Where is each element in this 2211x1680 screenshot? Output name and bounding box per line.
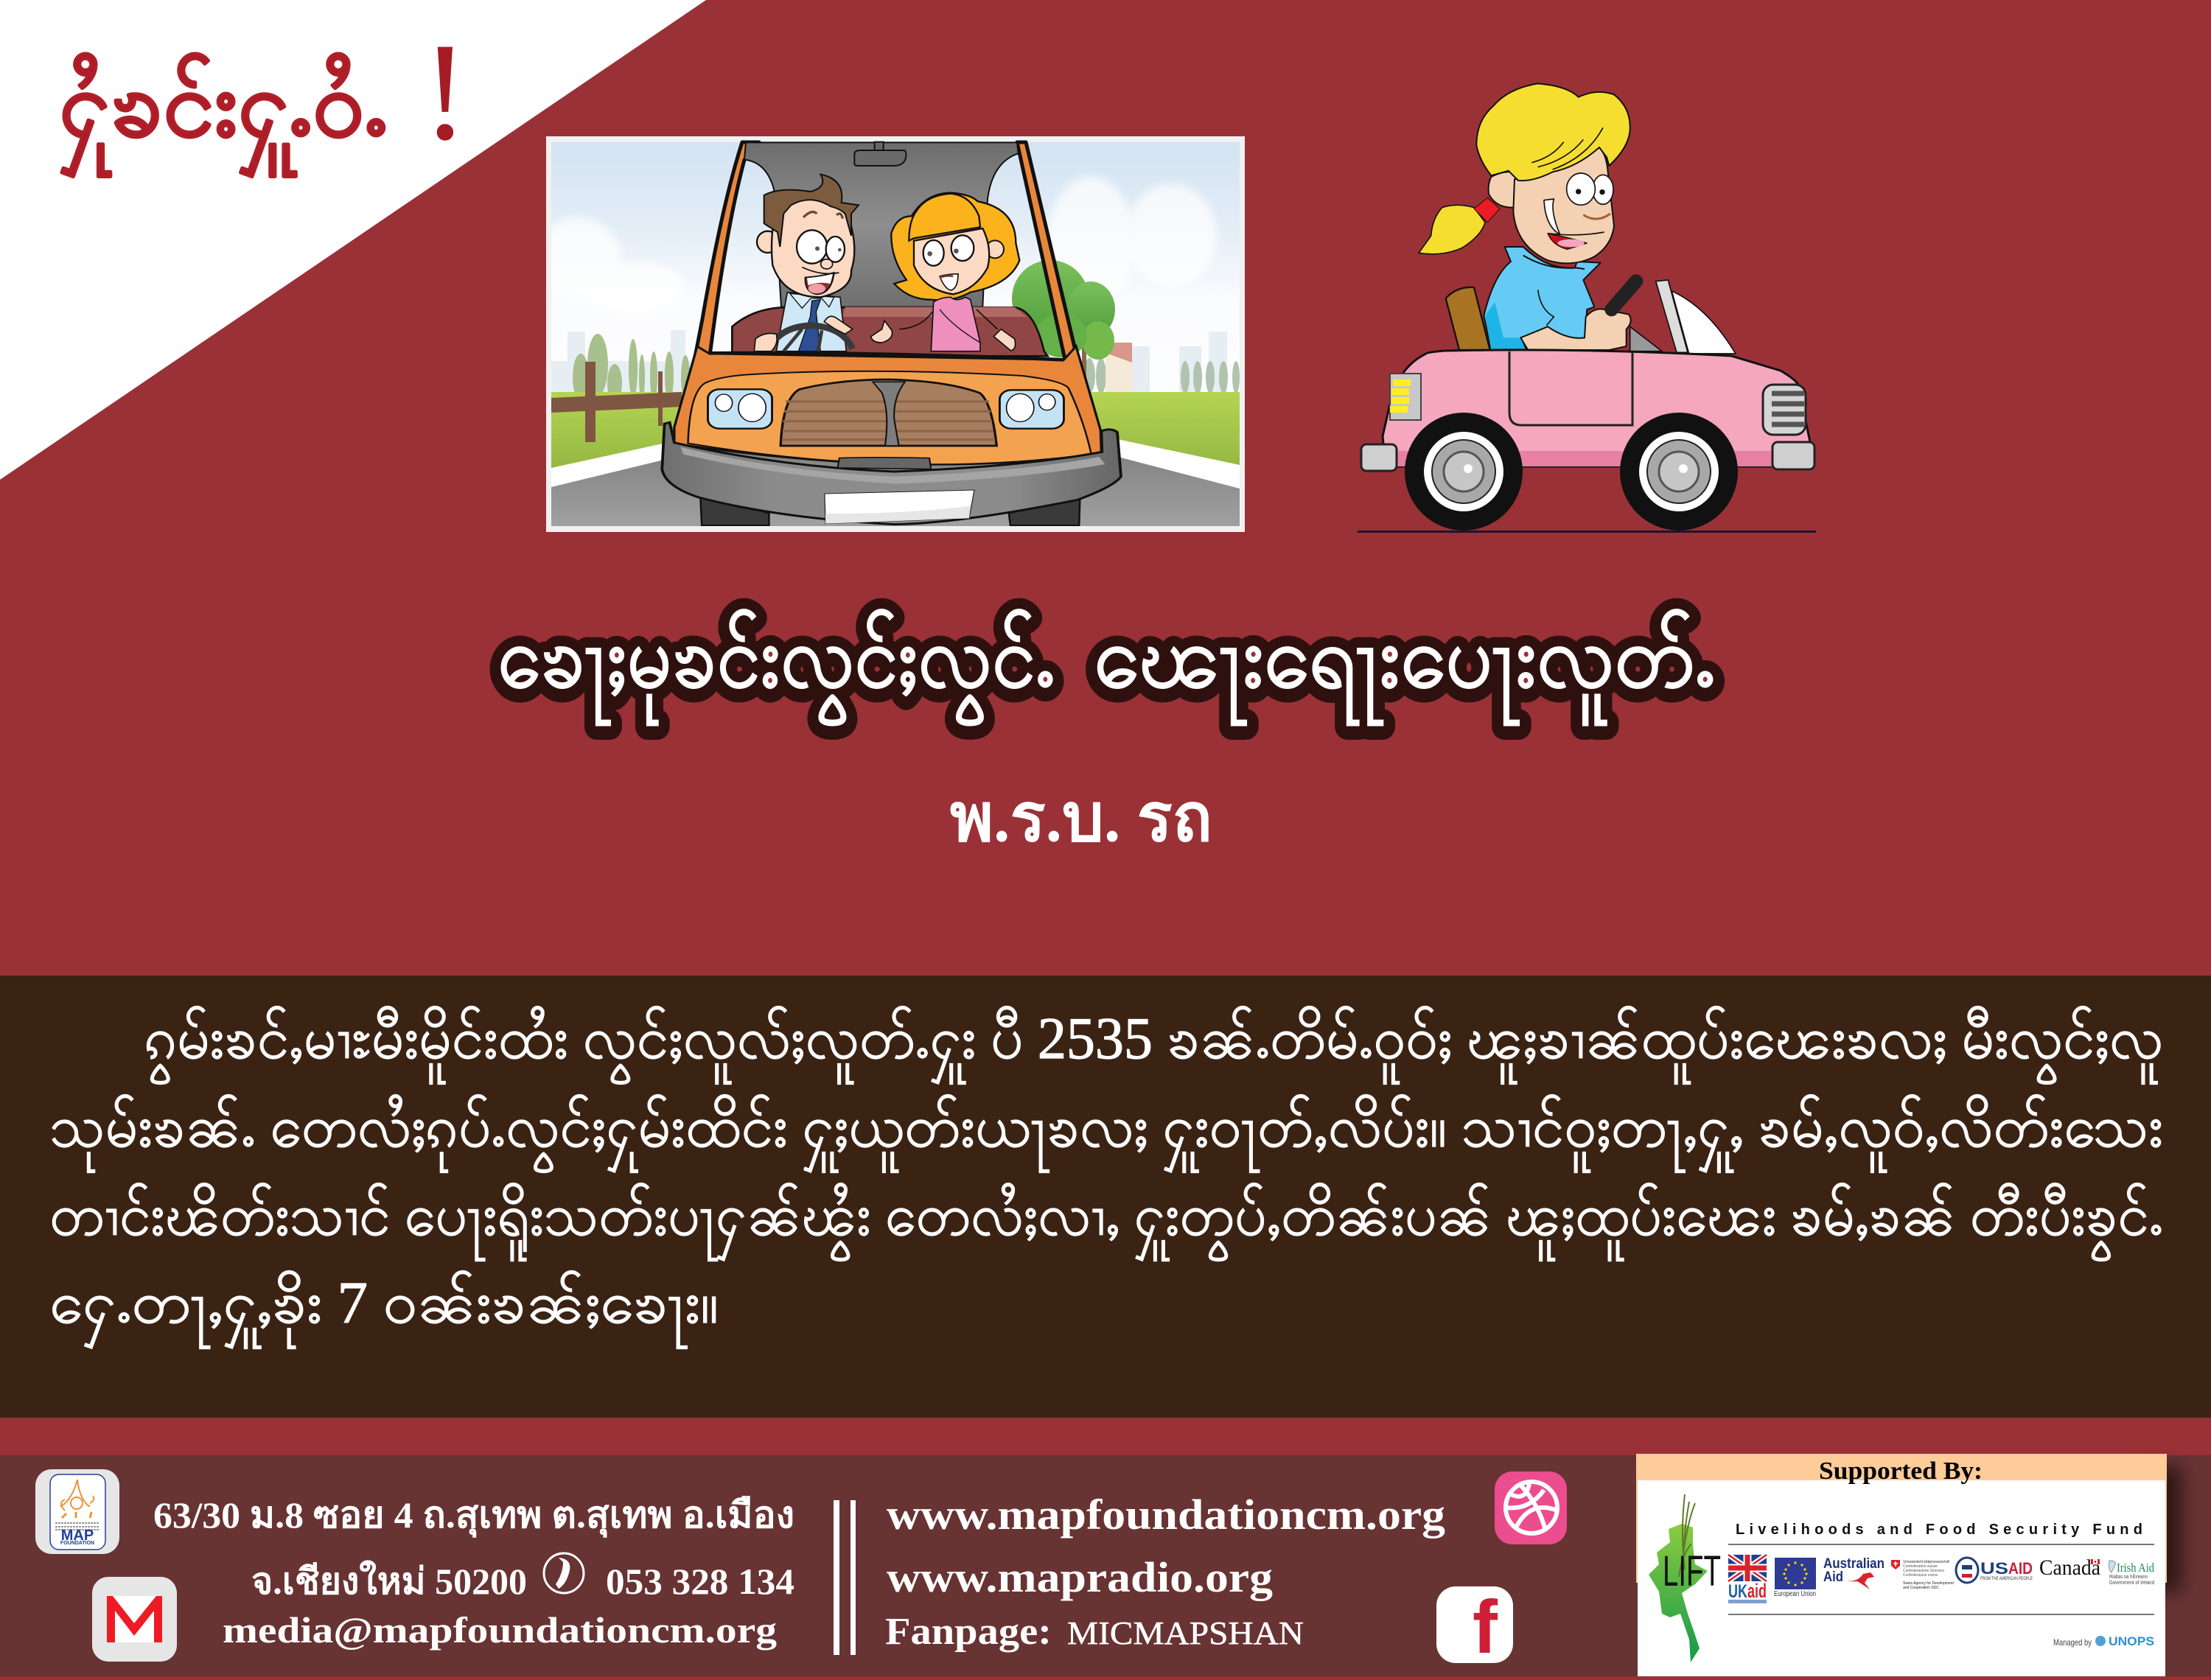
LIFT Myanmar map logo: LIFT [1663,1547,1721,1595]
rear grille [1763,385,1806,435]
web links: MICMAPSHAN [1067,1615,1304,1651]
Swiss Agency logo: Confederazione Svizzera [1903,1569,1944,1573]
cab pillars [694,142,1077,361]
USAID logo: AID [2008,1559,2033,1578]
woman [871,193,1019,351]
USAID logo: US [1980,1559,2008,1578]
white corner triangle [0,0,706,480]
grey roof lining [744,142,1019,307]
left headlight [708,389,772,429]
fence [551,362,682,442]
subtitle: พ.ร.บ. รถ [950,780,1212,855]
Canada wordmark: Canada [2039,1555,2100,1580]
truck front [662,346,1121,525]
man's hands [754,316,853,351]
background trees left [573,334,690,402]
web links: www.mapfoundationcm.org [887,1491,1445,1539]
right headlight [999,390,1063,429]
steering wheel bar [1612,281,1636,309]
hood latch [838,458,931,469]
illustration: girl driving pink car [1358,83,1816,533]
Australian Aid logo: Aid [1823,1569,1843,1585]
panel: body text: ၵွမ်းၶင်ႇမၢႊမီးမိူင်းထႆး လွင်ႈလူလ်ႈလူတ်ႉႁူး ပီ 2535 ၶၼ်ႉတိမ်ႉဝူဝ်ႈ ၽူႈၶၢၼ်ထူပ်းၽေးၶလႈ မီးလွင်ႈလူ [144,1006,2163,1085]
left wheel [1405,413,1523,531]
European Union logo: European Union [1774,1590,1816,1598]
illustration: couple in orange truck [533,136,1245,532]
European Union logo [1774,1558,1816,1598]
main title with dark outline [497,609,1716,727]
bumper [662,422,1121,525]
panel: body text: ႁေႉတႃႇႁူႇၶိုး 7 ဝၼ်းၶၼ်ႈၶေႃး။ [49,1270,719,1349]
car door [1509,351,1632,425]
mouth [1544,199,1604,249]
steering wheel [768,326,853,351]
Irish Aid logo [2109,1561,2154,1586]
icon: MAP Foundation logo [35,1469,119,1554]
address and contact text: 053 328 134 [606,1561,794,1602]
girl figure [1419,83,1736,354]
Managed by UNOPS: Managed by [2053,1637,2092,1648]
steering column [1630,326,1662,351]
icon: facebook [1436,1585,1513,1669]
Swiss Agency logo: Confédération suisse [1903,1564,1938,1569]
supported by heading: Supported By: [1819,1457,1983,1485]
panel: body text [0,976,2211,1418]
ground line [1358,531,1816,533]
Swiss Agency logo: Swiss Agency for Development [1903,1581,1955,1586]
icon: MAP Foundation logo: FOUNDATION [60,1541,94,1546]
address and contact text: 63/30 ม.8 ซอย 4 ถ.สุเทพ ต.สุเทพ อ.เมือง [153,1494,794,1538]
icon: telephone [544,1553,584,1593]
license plate [825,490,974,524]
main title with dark outline: ၽေႃးရေႃးပေႃးလူတ်ႉ [1094,611,1716,727]
hood [688,371,1091,464]
road [551,427,1240,526]
panel: supported by [1636,1454,2182,1676]
divider double line [834,1500,856,1655]
right wheel [1620,413,1738,531]
heading: top-left warning title: ႁႆုၶင်းႁူႉဝႆႉ [59,52,388,177]
eyes [1567,173,1613,205]
heading: top-left warning title [59,15,469,177]
Irish Aid logo: Government of Ireland [2109,1581,2154,1586]
address and contact text: media@mapfoundationcm.org [223,1609,777,1651]
background clouds [551,175,1218,280]
hair tie [1474,197,1500,223]
web links: www.mapradio.org [887,1553,1273,1601]
address and contact text [153,1494,794,1651]
left light [1390,374,1421,420]
collar line [1523,256,1585,269]
windshield [1656,280,1736,354]
skyline [551,330,1227,394]
Swiss Agency logo: Schweizerische Eidgenossenschaft [1903,1560,1950,1564]
main title with dark outline: ၶေႃႈမုၶင်းလွင်ႈလွင်ႉ [497,609,1055,725]
main title with dark outline: ၽေႃးရေႃးပေႃးလူတ်ႉ [1094,609,1716,725]
arm and hand [1520,309,1631,350]
car body [1383,350,1810,466]
ear [1489,172,1518,208]
Irish Aid logo: Rialtas na hÉireann [2109,1573,2148,1580]
UK aid logo: aid [1747,1580,1767,1602]
heading: top-left warning title: ! [422,15,469,169]
panel: footer band [0,1455,2211,1676]
bench seat [732,307,1048,356]
bumpers [1361,442,1814,471]
Managed by UNOPS [2053,1634,2154,1648]
main title with dark outline: ၶေႃႈမုၶင်းလွင်ႈလွင်ႉ [497,611,1055,727]
man [757,175,859,351]
icon: dribbble [1495,1471,1567,1544]
Irish Aid logo: Irish Aid [2117,1561,2154,1575]
UK aid logo [1728,1555,1767,1603]
background trees right [1083,358,1240,393]
cab interior [732,142,1048,356]
shirt [1484,247,1601,350]
rear-view mirror [854,142,906,166]
Managed by UNOPS: UNOPS [2109,1634,2154,1648]
USAID logo [1956,1558,2033,1583]
orange body [674,346,1101,464]
hair [1476,83,1630,181]
web links [885,1491,1445,1653]
UK aid logo: UK [1728,1581,1747,1602]
ponytail [1419,205,1485,254]
Swiss Agency logo [1891,1560,1955,1590]
nose [1583,214,1610,219]
green tree [1012,260,1115,383]
panel: body text: သုမ်းၶၼ်ႉ တေလႆႈၵုပ်ႉလွင်ႈႁုမ်းထိင်း ႁူႈယူတ်းယႃၶလႈ ႁူးဝႃတ်ႇလိပ်း။ သၢင်ဝူႈတႃႇႁူႇ ၶမ်ႇလူဝ်ႇလိတ်းသေး [49,1094,2163,1173]
Australian Aid logo: Australian [1823,1556,1885,1572]
Swiss Agency logo: and Cooperation SDC [1903,1586,1939,1590]
house [1106,343,1132,392]
panel: body text: တၢင်းၽိတ်းသၢင် ပေႃးရိူးသတ်းပႃႁၼ်ၽွႆး တေလႆႈလၢႇ ႁူးတွပ်ႇတိၼ်းပၼ် ၽူႈထူပ်းၽေး ၶမ်ႇၶၼ် တီးပီးၶွင်ႉ [49,1183,2163,1261]
divider rules [1728,1544,2154,1615]
windshield bottom edge [710,353,1063,360]
web links: Fanpage: [885,1611,1052,1653]
fund name: Livelihoods and Food Security Fund [1736,1522,2142,1538]
grass [551,392,1240,488]
LIFT Myanmar map logo [1649,1494,1721,1662]
USAID logo: FROM THE AMERICAN PEOPLE [1980,1576,2033,1581]
icon: facebook: f [1473,1585,1498,1669]
icon: gmail [92,1577,177,1662]
face [1513,147,1614,263]
grille [780,379,996,446]
address and contact text: จ.เชียงใหม่ 50200 [251,1560,527,1602]
car seat [1446,287,1490,350]
Swiss Agency logo: Confederaziun svizra [1903,1573,1938,1578]
icon: MAP Foundation logo: MAP [61,1527,94,1544]
truck wheels [700,494,1080,525]
Australian Aid logo [1823,1556,1885,1589]
